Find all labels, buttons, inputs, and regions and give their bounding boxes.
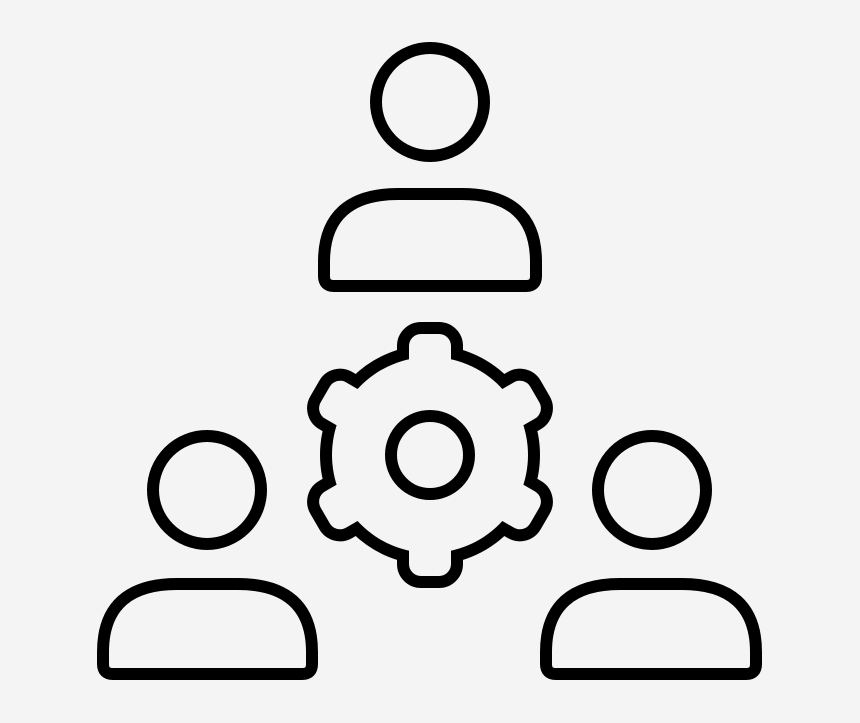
person: top <box>324 48 536 286</box>
person: right <box>546 436 756 674</box>
icon: gear <box>315 334 545 576</box>
person: left <box>103 436 312 674</box>
